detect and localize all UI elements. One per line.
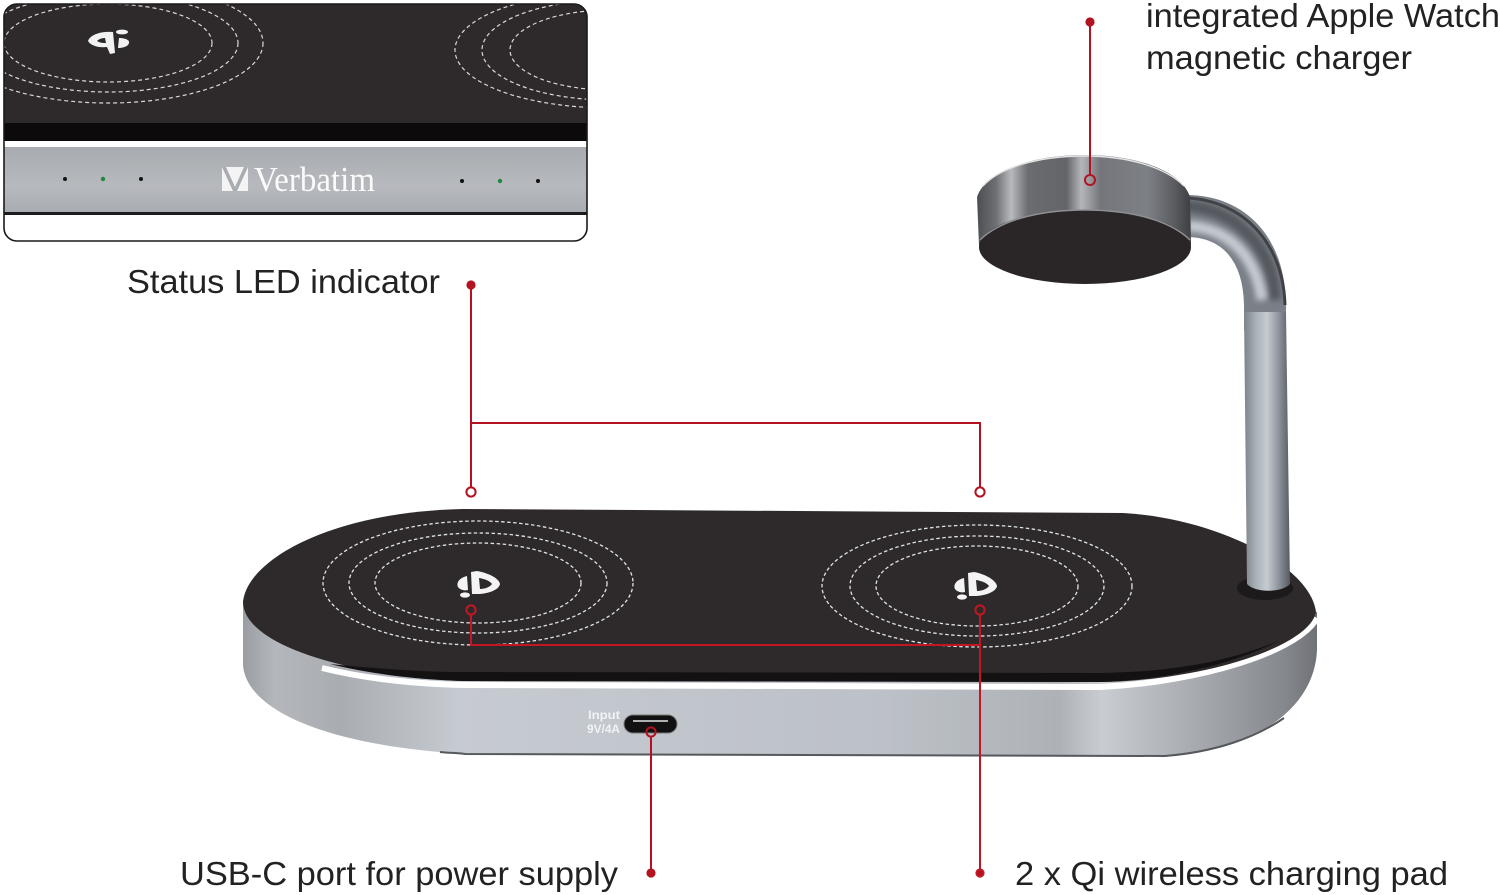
inset: close-up of status LEDs bbox=[3, 3, 588, 242]
USB-C port bbox=[624, 715, 677, 733]
puck underside bbox=[979, 210, 1191, 284]
arm base collar bbox=[1237, 576, 1293, 600]
label: 2 x Qi wireless charging pad: 2 x Qi wireless charging pad bbox=[1015, 855, 1448, 892]
inset: charging ring markings bbox=[4, 4, 586, 108]
inset: Verbatim logo bbox=[222, 166, 375, 192]
callout: Apple Watch charger line bbox=[1085, 18, 1095, 185]
pad 1 rings bbox=[323, 521, 633, 645]
input rating text: 9V/4A bbox=[587, 724, 620, 736]
callout: status LED lines bbox=[466, 281, 985, 497]
puck side band bbox=[977, 155, 1191, 245]
charger base bbox=[243, 509, 1317, 756]
charger stand arm and watch puck bbox=[977, 155, 1293, 600]
label: USB-C port for power supply: USB-C port for power supply bbox=[180, 855, 619, 892]
inset: Qi logo bbox=[88, 30, 129, 54]
callout: USB-C port line bbox=[646, 727, 656, 877]
inset: silver front edge bbox=[4, 147, 587, 213]
inset: Verbatim logo: Verbatim bbox=[254, 160, 375, 199]
input rating text: Input bbox=[588, 710, 620, 722]
inset: LED dots bbox=[63, 177, 540, 183]
Qi logo pad 1 bbox=[457, 571, 500, 598]
white highlight bbox=[322, 618, 1317, 687]
silver side bbox=[243, 600, 1317, 756]
Qi logo pad 2 bbox=[954, 572, 997, 600]
label: integrated Apple Watch magnetic charger: magnetic charger bbox=[1146, 39, 1412, 76]
pad 2 rings bbox=[822, 525, 1132, 647]
arm tube bbox=[1186, 198, 1290, 591]
label: status LED indicator: Status LED indicator bbox=[127, 263, 440, 300]
black top plate bbox=[243, 509, 1316, 682]
callout: Qi charging pad lines bbox=[466, 605, 985, 877]
